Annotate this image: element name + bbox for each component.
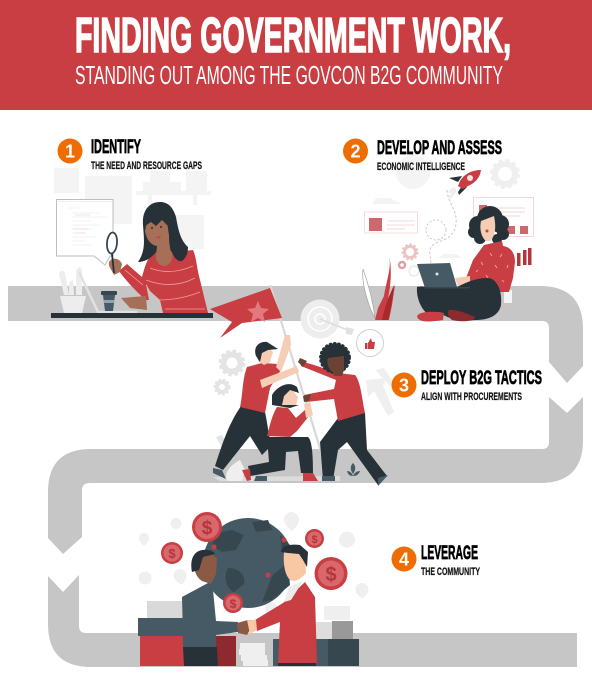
rocket: [449, 170, 481, 198]
desk: [51, 313, 213, 318]
chart card right: [474, 198, 534, 236]
step 2 label: 2: [350, 142, 361, 162]
dollar coins: $: [311, 534, 318, 546]
dollar coins: $: [168, 546, 176, 561]
faded plant and ground: [213, 476, 340, 481]
globe: [203, 518, 293, 608]
hair: [468, 206, 509, 244]
step 1 label: IDENTIFY: [91, 136, 141, 158]
sweater: [466, 241, 515, 292]
chart card left: [364, 212, 418, 233]
coffee cup: [101, 291, 117, 311]
magnifying glass: [106, 232, 118, 273]
flag pole: [270, 285, 330, 481]
thumbs-up bubble: [356, 330, 384, 356]
containers right: [273, 606, 359, 666]
shoes: [417, 312, 444, 321]
bar chart: [517, 248, 532, 266]
step 4 label: 4: [399, 550, 409, 570]
step 2 label: ECONOMIC INTELLIGENCE: [377, 161, 465, 173]
dashed flight path: [430, 190, 456, 266]
winding road path: [8, 286, 583, 667]
dollar coins: $: [230, 597, 237, 611]
step 3 label: [392, 367, 542, 403]
hands: [455, 276, 470, 287]
step 3 label: ALIGN WITH PROCUREMENTS: [421, 391, 522, 403]
gear icon: [492, 161, 518, 187]
man right: [298, 344, 388, 486]
kneeling woman: [242, 384, 318, 481]
dollar coins: $: [202, 518, 213, 539]
header banner: [0, 0, 592, 110]
faded location pins and coins: [138, 512, 368, 614]
small gears: [399, 244, 419, 276]
step 4 label: THE COMMUNITY: [421, 566, 480, 578]
dollar coins: [161, 512, 348, 613]
step 3 label: 3: [399, 376, 409, 396]
handshake: [237, 620, 257, 635]
face: [480, 216, 495, 241]
background shapes: [396, 155, 430, 189]
target with arrow: [300, 300, 354, 338]
sweater: [119, 249, 208, 313]
scene 2: woman with laptop: [363, 155, 534, 321]
laptop: [79, 272, 137, 312]
step 1 label: THE NEED AND RESOURCE GAPS: [91, 160, 202, 172]
face and neck: [145, 217, 172, 266]
faded arrows: [366, 368, 396, 416]
code window callout: [56, 200, 113, 265]
plant: [363, 255, 395, 320]
man right: [255, 545, 317, 666]
step 4 label: LEVERAGE: [421, 542, 478, 564]
gears: [214, 351, 244, 394]
hair: [138, 202, 188, 262]
pencil pot: [59, 267, 86, 313]
step 2 label: [343, 137, 502, 173]
step 1 label: [58, 136, 202, 172]
containers left: [138, 601, 236, 666]
scene 3: team raising flag: [210, 285, 396, 486]
step 1 label: 1: [65, 142, 75, 162]
small plant: [347, 463, 360, 476]
step 4 label: [392, 542, 480, 578]
flag: [210, 288, 282, 338]
laptop: [417, 263, 470, 288]
hands: [109, 259, 122, 275]
scene 1: woman with magnifying glass: [51, 168, 213, 318]
man left: [213, 335, 299, 479]
man left: [182, 550, 238, 666]
background shelves and frames: [54, 168, 211, 249]
dollar coins: $: [325, 564, 337, 586]
scene 4: handshake and globe: [138, 512, 368, 666]
coin stack: [239, 643, 268, 666]
crossed legs: [417, 278, 501, 321]
seat box: [504, 290, 512, 303]
